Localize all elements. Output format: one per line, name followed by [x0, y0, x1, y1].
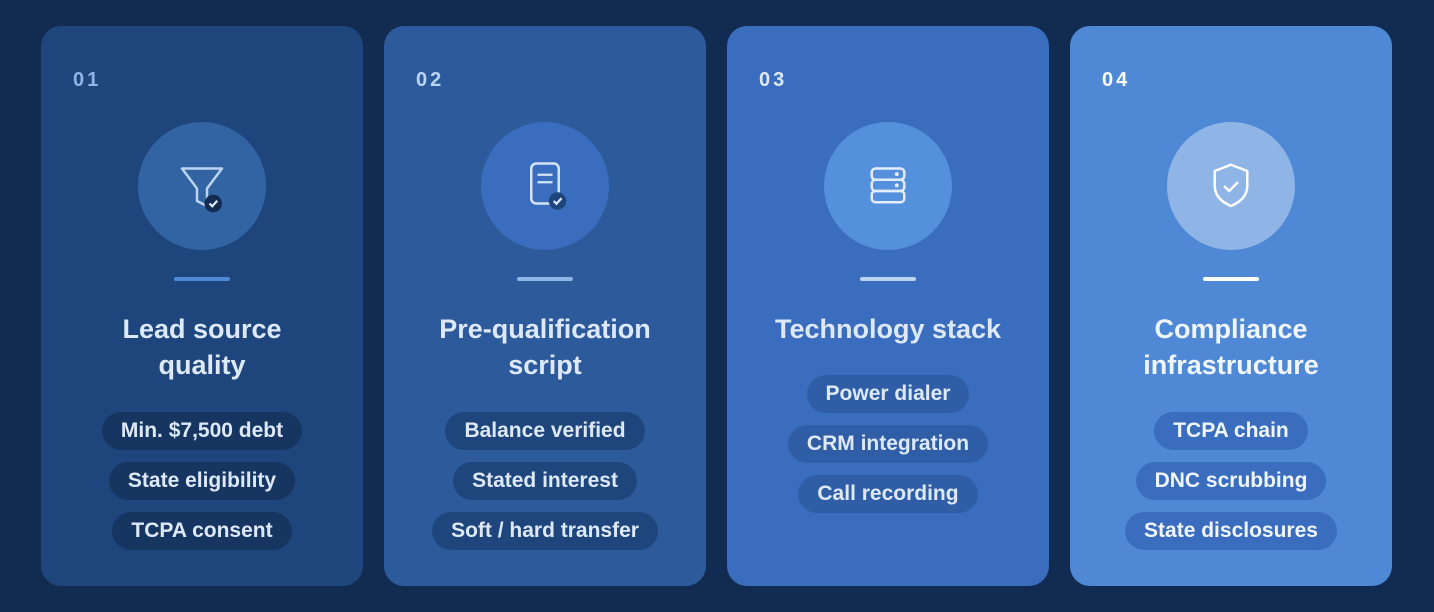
pills: Call recording [817, 482, 959, 505]
pills: Balance verified [464, 419, 626, 442]
pills: TCPA consent [131, 519, 273, 542]
title: quality [158, 350, 246, 380]
pills: CRM integration [807, 432, 969, 455]
card 3: technology stack [727, 26, 1049, 586]
pills [102, 412, 302, 550]
title: Technology stack [775, 314, 1001, 344]
title: script [508, 350, 582, 380]
title: Compliance [1154, 314, 1308, 344]
pills: Power dialer [826, 382, 950, 405]
pills [1125, 412, 1337, 550]
card 1: lead source quality [41, 26, 363, 586]
pills: Min. $7,500 debt [121, 419, 283, 442]
number 02: 02 [416, 69, 444, 91]
icon: document with check [481, 122, 609, 250]
pills: Stated interest [472, 469, 618, 492]
title [122, 314, 282, 380]
title [439, 314, 651, 380]
card 2: pre-qualification script [384, 26, 706, 586]
title [1143, 314, 1319, 380]
pills: TCPA chain [1173, 419, 1289, 442]
title: Pre-qualification [439, 314, 651, 344]
card 4: compliance infrastructure [1070, 26, 1392, 586]
pills: Soft / hard transfer [451, 519, 639, 542]
pills [432, 412, 658, 550]
number 04: 04 [1102, 69, 1130, 91]
pills: State disclosures [1144, 519, 1318, 542]
number 03: 03 [759, 69, 787, 91]
icon: shield with check [1167, 122, 1295, 250]
title: Lead source [122, 314, 282, 344]
title: infrastructure [1143, 350, 1319, 380]
icon: server stack [824, 122, 952, 250]
icon: funnel with check [138, 122, 266, 250]
pills: DNC scrubbing [1155, 469, 1307, 492]
pills: State eligibility [128, 469, 276, 492]
number 01: 01 [73, 69, 101, 91]
pills [788, 375, 988, 513]
